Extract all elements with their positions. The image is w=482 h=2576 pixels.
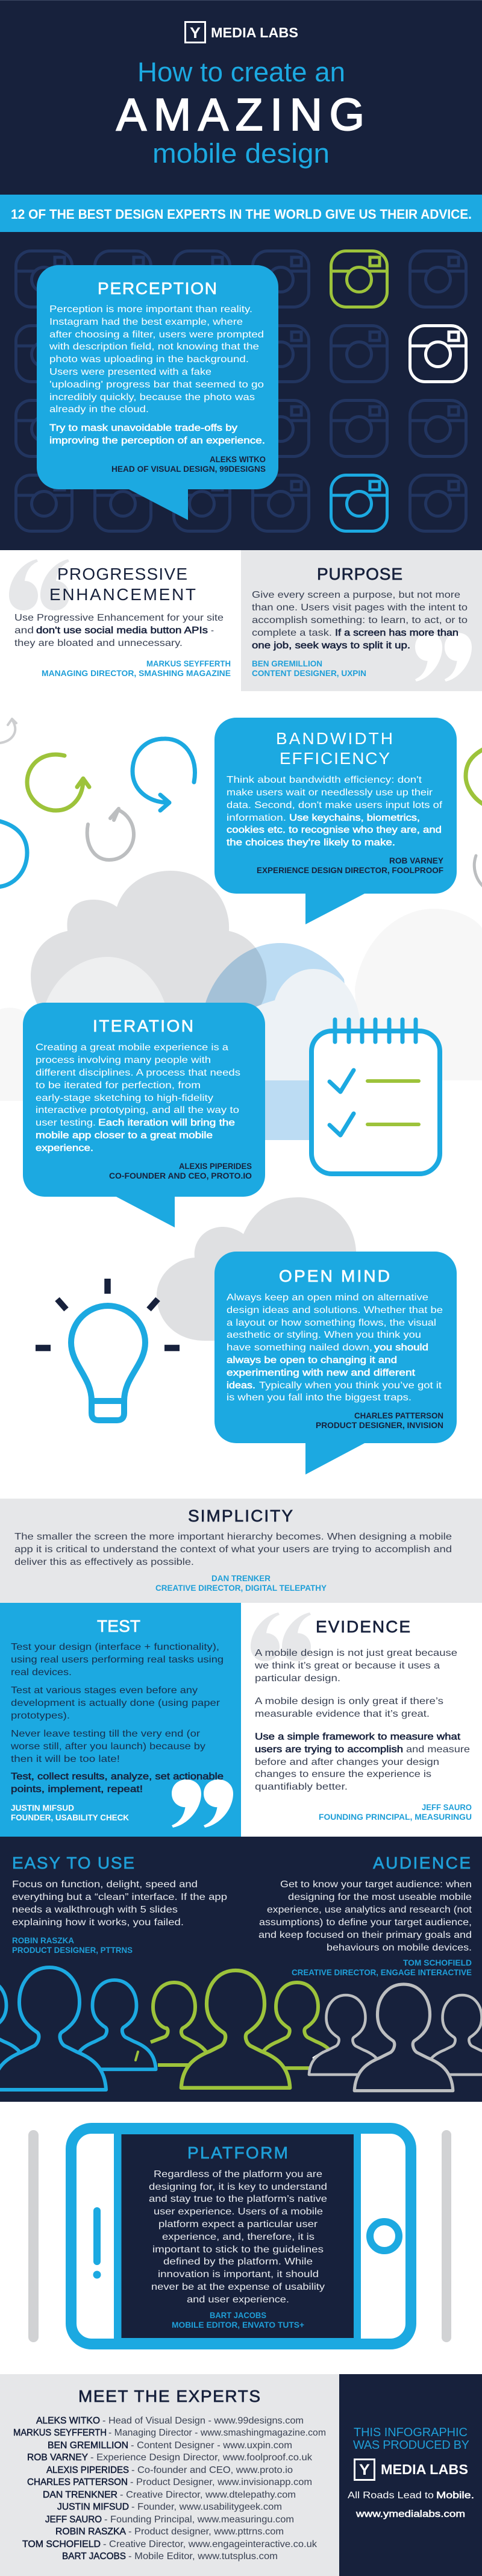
text: iteration body: different disciplines. A process that needs bbox=[36, 1068, 240, 1078]
author: Bart Jacobs bbox=[172, 2310, 304, 2330]
author: Tom Schofield: TOM SCHOFIELD bbox=[403, 1958, 472, 1967]
text: open mind body: design ideas and solutions. Whether that be bbox=[227, 1305, 443, 1315]
text: open mind body: you should bbox=[374, 1343, 428, 1353]
tagline: Mobile. bbox=[436, 2490, 474, 2501]
heading: produced by: THIS INFOGRAPHIC bbox=[354, 2426, 468, 2439]
heading: open mind: OPEN MIND bbox=[279, 1267, 391, 1285]
text: open mind body: ideas. bbox=[227, 1380, 255, 1391]
text: bandwidth body: the choices they're likely to make. bbox=[227, 838, 395, 848]
list: experts: BEN GREMILLION bbox=[48, 2440, 128, 2451]
list: experts: - Managing Director - www.smashingmagazine.com bbox=[108, 2428, 326, 2438]
list: experts: - Mobile Editor, www.tutsplus.com bbox=[128, 2551, 278, 2562]
list: experts: - Creative Director, www.engageinteractive.co.uk bbox=[103, 2539, 318, 2549]
logo: Y Media Labs: MEDIA LABS bbox=[211, 25, 298, 40]
text: progressive body: and bbox=[14, 625, 34, 636]
text: evidence body: we think it’s great or because it uses a bbox=[254, 1661, 440, 1671]
text: platform body: defined by the platform. While bbox=[163, 2257, 313, 2267]
text: platform body: important to stick to the guidelines bbox=[152, 2245, 324, 2255]
text: bandwidth body: Use keychains, biometrics, bbox=[289, 813, 420, 823]
author: Tom Schofield bbox=[292, 1958, 472, 1977]
list: experts: ROB VARNEY bbox=[27, 2452, 88, 2463]
text: simplicity body: app it is critical to understand the context of what your users are trying to accomplish and bbox=[14, 1544, 452, 1555]
text: open mind body: have something nailed down, bbox=[227, 1343, 372, 1353]
text: iteration body: experience. bbox=[36, 1143, 93, 1153]
text: iteration body: user testing. bbox=[36, 1118, 96, 1128]
text: easy to use body: everything but a “clean” interface. If the app bbox=[12, 1892, 227, 1902]
panel: bandwidth efficiency bubble bbox=[214, 718, 457, 924]
text: audience body: behaviours on mobile devices. bbox=[327, 1943, 472, 1953]
text: test body: worse still, after you launch) because by bbox=[10, 1741, 205, 1752]
text: progressive body bbox=[14, 613, 224, 648]
text: test body: Test, collect results, analyze, set actionable bbox=[11, 1772, 224, 1782]
banner: 12 OF THE BEST DESIGN EXPERTS IN THE WORLD GIVE US THEIR ADVICE. bbox=[11, 207, 472, 222]
heading: produced by: WAS PRODUCED BY bbox=[353, 2439, 469, 2452]
text: progressive body: Use Progressive Enhancement for your site bbox=[14, 613, 224, 623]
text: purpose body bbox=[252, 590, 468, 651]
author: Robin Raszka bbox=[12, 1935, 133, 1955]
heading: easy to use: EASY TO USE bbox=[12, 1854, 136, 1872]
text: audience body bbox=[258, 1879, 472, 1953]
icon: light bulb bbox=[36, 1279, 180, 1420]
text: bandwidth body: data. Second, don't make users input lots of bbox=[227, 800, 443, 810]
author: Jeff Sauro bbox=[319, 1802, 472, 1822]
author: Aleks Witko bbox=[111, 454, 266, 474]
text: open mind body: is when you fall into the biggest traps. bbox=[227, 1393, 412, 1403]
list: experts: - Founder, www.usabilitygeek.com bbox=[131, 2502, 282, 2512]
logo: Y Media Labs bbox=[354, 2460, 468, 2480]
text: open mind body: always be open to changing it and bbox=[227, 1355, 397, 1365]
list: experts: - Co-founder and CEO, www.proto.io bbox=[131, 2465, 293, 2475]
heading: perception: PERCEPTION bbox=[98, 279, 218, 298]
author: Ben Gremillion: BEN GREMILLION bbox=[252, 659, 322, 668]
icon: closing quote mark bbox=[172, 1779, 233, 1828]
author: Bart Jacobs: MOBILE EDITOR, ENVATO TUTS+ bbox=[172, 2320, 304, 2330]
author: Dan Trenker: CREATIVE DIRECTOR, DIGITAL TELEPATHY bbox=[155, 1583, 327, 1593]
clouds: lower bbox=[157, 1197, 356, 1341]
text: simplicity body: The smaller the screen the more important hierarchy becomes. When designing a mobile bbox=[14, 1532, 452, 1542]
text: platform body: user experience. Users of a mobile bbox=[154, 2207, 323, 2217]
title: How to create an bbox=[137, 57, 345, 87]
text: purpose body: Give every screen a purpose, but not more bbox=[252, 590, 460, 600]
text: bandwidth body: information. bbox=[227, 813, 286, 823]
author: Ben Gremillion bbox=[252, 659, 366, 678]
text: perception body: improving the perception of an experience. bbox=[49, 436, 265, 446]
author: Alexis Piperides: CO-FOUNDER AND CEO, PROTO.IO bbox=[109, 1171, 252, 1180]
panel: platform phone bbox=[28, 2128, 451, 2344]
text: progressive body: don't use social media button APIs bbox=[36, 625, 208, 636]
text: evidence body: before and after changes your design bbox=[255, 1757, 439, 1767]
text: platform body: designing for, it is key to understand bbox=[149, 2182, 327, 2192]
heading: bandwidth efficiency: EFFICIENCY bbox=[280, 749, 391, 768]
logo: Y Media Labs bbox=[186, 22, 298, 42]
text: test body: development is actually done (using paper bbox=[11, 1698, 221, 1708]
author: Alexis Piperides bbox=[109, 1161, 252, 1180]
panel: meet the experts bbox=[0, 2374, 339, 2576]
text: open mind body: a layout or how something flows, the visual bbox=[227, 1318, 436, 1328]
logo: Y Media Labs: Y bbox=[359, 2462, 370, 2478]
list: experts: JEFF SAURO bbox=[45, 2515, 102, 2525]
icon: phone body bbox=[71, 2128, 411, 2344]
text: platform body: Regardless of the platform you are bbox=[154, 2169, 322, 2180]
text: platform body: never be at the expense of usability bbox=[151, 2282, 325, 2292]
text: perception body: Instagram had the best example, where bbox=[49, 317, 243, 327]
author: Justin Mifsud: JUSTIN MIFSUD bbox=[11, 1803, 74, 1813]
heading: bandwidth efficiency bbox=[276, 729, 394, 768]
text: iteration body: Creating a great mobile experience is a bbox=[36, 1042, 228, 1053]
text: iteration body: Each iteration will bring the bbox=[98, 1118, 235, 1128]
list: experts: CHARLES PATTERSON bbox=[27, 2477, 128, 2487]
icon grid: cameras bbox=[16, 251, 466, 531]
author: Dan Trenker bbox=[155, 1573, 327, 1593]
list: experts: JUSTIN MIFSUD bbox=[57, 2502, 129, 2512]
text: evidence body: and measure bbox=[406, 1744, 470, 1755]
heading: platform: PLATFORM bbox=[187, 2143, 289, 2162]
text: perception body: with description field, not knowing that the bbox=[49, 342, 259, 352]
author: Charles Patterson: PRODUCT DESIGNER, INVISION bbox=[316, 1420, 443, 1430]
text: open mind body: Always keep an open mind on alternative bbox=[227, 1293, 428, 1303]
text: platform body: experience, and, therefore, it is bbox=[162, 2232, 315, 2242]
icon: refresh arrows bbox=[0, 719, 482, 887]
text: audience body: and keep focused on their primary goals and bbox=[258, 1930, 472, 1940]
text: perception body: already in the cloud. bbox=[49, 404, 149, 415]
heading: meet the experts: MEET THE EXPERTS bbox=[78, 2387, 261, 2405]
text: platform body bbox=[149, 2169, 327, 2305]
text: perception body: photo was uploading in the background. bbox=[49, 354, 249, 365]
text: iteration body: process involving many people with bbox=[36, 1055, 211, 1065]
list: experts: - Experience Design Director, www.foolproof.co.uk bbox=[90, 2452, 313, 2463]
text: perception body: after choosing a filter, users were prompted bbox=[49, 330, 264, 340]
heading: progressive enhancement: PROGRESSIVE bbox=[57, 565, 189, 583]
text: iteration body: mobile app closer to a great mobile bbox=[36, 1130, 213, 1141]
text: evidence body: users are trying to accomplish bbox=[255, 1744, 403, 1755]
list: experts: TOM SCHOFIELD bbox=[22, 2539, 101, 2549]
author: Aleks Witko: HEAD OF VISUAL DESIGN, 99DESIGNS bbox=[111, 464, 266, 474]
heading: simplicity: SIMPLICITY bbox=[188, 1506, 294, 1525]
heading: bandwidth efficiency: BANDWIDTH bbox=[276, 729, 394, 748]
tagline bbox=[348, 2490, 474, 2501]
text: purpose body: accomplish something: to learn, to act, or to bbox=[252, 615, 468, 625]
author: Alexis Piperides: ALEXIS PIPERIDES bbox=[179, 1161, 252, 1171]
author: Jeff Sauro: FOUNDING PRINCIPAL, MEASURINGU bbox=[319, 1812, 472, 1822]
text: bandwidth body: make users wait or needlessly use up their bbox=[227, 788, 433, 798]
text: purpose body: If a screen has more than bbox=[335, 628, 459, 638]
text: platform body: and stay true to the platform’s native bbox=[149, 2194, 327, 2204]
text: perception body: Perception is more important than reality. bbox=[49, 304, 252, 315]
list: experts: - Head of Visual Design - www.99designs.com bbox=[102, 2416, 304, 2426]
author: Markus Seyfferth: MANAGING DIRECTOR, SMASHING MAGAZINE bbox=[42, 668, 231, 678]
text: perception body bbox=[49, 304, 265, 446]
text: perception body: 'uploading' progress bar that seemed to go bbox=[49, 380, 264, 390]
text: evidence body: particular design. bbox=[255, 1673, 340, 1684]
panel: simplicity bbox=[0, 1499, 482, 1603]
decorative motion bars bbox=[28, 2130, 39, 2342]
panel: progressive enhancement bbox=[9, 559, 231, 678]
author: Jeff Sauro: JEFF SAURO bbox=[422, 1802, 472, 1812]
list: experts: ALEKS WITKO bbox=[36, 2416, 100, 2426]
text: evidence body: measurable evidence that it’s great. bbox=[255, 1709, 430, 1719]
author: Markus Seyfferth: MARKUS SEYFFERTH bbox=[146, 659, 231, 668]
panel: producer credit bbox=[339, 2374, 482, 2576]
text: audience body: Get to know your target audience: when bbox=[280, 1879, 472, 1890]
panel: easy to use and audience bbox=[0, 1837, 482, 2102]
text: bandwidth body: cookies etc. to recognise who they are, and bbox=[227, 825, 442, 835]
list: experts: ROBIN RASZKA bbox=[55, 2527, 126, 2537]
text: audience body: experience, use analytics and research (not bbox=[267, 1905, 472, 1915]
list: experts: - Product designer, www.pttrns.com bbox=[128, 2527, 284, 2537]
author: Dan Trenker: DAN TRENKER bbox=[211, 1573, 271, 1583]
illustration: audience silhouettes bbox=[0, 1967, 482, 2091]
tagline: All Roads Lead to bbox=[348, 2490, 434, 2501]
text: perception body: Users were presented with a fake bbox=[49, 367, 211, 377]
text: test body bbox=[10, 1642, 224, 1794]
text: perception body: Try to mask unavoidable trade-offs by bbox=[49, 423, 237, 433]
text: iteration body bbox=[36, 1042, 240, 1153]
icon: opening quote mark bbox=[9, 559, 69, 610]
logo: Y Media Labs: MEDIA LABS bbox=[381, 2462, 468, 2477]
list: experts: - Founding Principal, www.measuringu.com bbox=[104, 2515, 294, 2525]
text: test body: prototypes). bbox=[11, 1711, 70, 1721]
heading: purpose: PURPOSE bbox=[317, 565, 404, 583]
text: test body: Never leave testing till the very end (or bbox=[11, 1729, 201, 1739]
text: easy to use body: needs a walkthrough with 5 slides bbox=[12, 1905, 178, 1915]
panel: purpose bbox=[241, 550, 482, 691]
text: progressive body: they are bloated and unnecessary. bbox=[14, 638, 183, 648]
list: experts bbox=[13, 2416, 326, 2562]
text: evidence body: A mobile design is not just great because bbox=[255, 1648, 457, 1658]
text: evidence body bbox=[254, 1648, 470, 1792]
list: experts: - Creative Director, www.dtelepathy.com bbox=[120, 2490, 296, 2500]
text: test body: points, implement, repeat! bbox=[11, 1784, 143, 1794]
heading: produced by bbox=[353, 2426, 469, 2452]
banner bbox=[0, 195, 482, 232]
text: open mind body: experimenting with new and different bbox=[227, 1368, 416, 1378]
text: iteration body: to be iterated for perfection, from bbox=[36, 1080, 201, 1091]
title: mobile design bbox=[152, 138, 330, 169]
text: purpose body: than one. Users visit pages with the intent to bbox=[252, 603, 468, 613]
icon: closing quote mark bbox=[415, 633, 472, 682]
list: experts: DAN TRENKNER bbox=[43, 2490, 117, 2500]
author: Bart Jacobs: BART JACOBS bbox=[210, 2310, 266, 2320]
panel: iteration bubble bbox=[23, 1003, 265, 1227]
text: iteration body: interactive prototyping, and all the way to bbox=[36, 1105, 239, 1115]
heading: iteration: ITERATION bbox=[93, 1017, 195, 1035]
author: Rob Varney: EXPERIENCE DESIGN DIRECTOR, FOOLPROOF bbox=[257, 865, 443, 875]
logo: Y Media Labs: Y bbox=[190, 25, 201, 42]
heading: progressive enhancement bbox=[49, 565, 197, 604]
text: evidence body: A mobile design is only great if there’s bbox=[255, 1696, 443, 1706]
text: open mind body: Typically when you think you’ve got it bbox=[259, 1380, 442, 1391]
text: evidence body: quantifiably better. bbox=[255, 1782, 348, 1792]
text: bandwidth body bbox=[227, 775, 443, 848]
panel: test bbox=[0, 1603, 241, 1837]
text: platform body: and user experience. bbox=[187, 2295, 289, 2305]
author: Charles Patterson: CHARLES PATTERSON bbox=[354, 1411, 443, 1420]
heading: test: TEST bbox=[97, 1617, 142, 1635]
website: www.ymedialabs.com bbox=[355, 2509, 465, 2519]
text: bandwidth body: Think about bandwidth efficiency: don't bbox=[227, 775, 422, 785]
text: test body: using real users performing real tasks using bbox=[11, 1655, 224, 1665]
author: Robin Raszka: PRODUCT DESIGNER, PTTRNS bbox=[12, 1945, 133, 1955]
text: test body: then it will be too late! bbox=[11, 1754, 120, 1764]
text: easy to use body: Focus on function, delight, speed and bbox=[12, 1879, 198, 1890]
panel: open mind bubble bbox=[214, 1252, 457, 1474]
text: purpose body: complete a task. bbox=[252, 628, 332, 638]
author: Rob Varney bbox=[257, 856, 444, 875]
heading: audience: AUDIENCE bbox=[373, 1854, 472, 1872]
text: test body: real devices. bbox=[11, 1667, 72, 1678]
author: Rob Varney: ROB VARNEY bbox=[389, 856, 444, 865]
title: AMAZING bbox=[116, 89, 365, 140]
text: evidence body: changes to ensure the experience is bbox=[255, 1769, 431, 1779]
heading: progressive enhancement: ENHANCEMENT bbox=[49, 585, 197, 604]
list: experts: MARKUS SEYFFERTH bbox=[13, 2428, 107, 2438]
text: audience body: assumptions) to define your target audience, bbox=[259, 1917, 472, 1928]
heading: evidence: EVIDENCE bbox=[316, 1617, 412, 1636]
icon: notebook checklist bbox=[311, 1020, 440, 1174]
panel: perception bubble bbox=[37, 265, 278, 520]
author: Robin Raszka: ROBIN RASZKA bbox=[12, 1935, 74, 1945]
text: audience body: designing for the most useable mobile bbox=[288, 1892, 472, 1902]
text: simplicity body bbox=[14, 1532, 452, 1567]
text: test body: Test at various stages even before any bbox=[11, 1685, 198, 1696]
author: Justin Mifsud: FOUNDER, USABILITY CHECK bbox=[11, 1813, 129, 1822]
text: open mind body bbox=[227, 1293, 443, 1403]
list: experts: - Content Designer - www.uxpin.com bbox=[131, 2440, 292, 2451]
text: progressive body: - bbox=[211, 625, 214, 636]
clouds: upper bbox=[0, 871, 482, 1140]
title bbox=[116, 57, 365, 169]
list: experts: - Product Designer, www.invisionapp.com bbox=[130, 2477, 312, 2487]
text: easy to use body bbox=[12, 1879, 227, 1928]
text: platform body: innovation is important, it should bbox=[158, 2269, 319, 2280]
text: easy to use body: explaining how it works, you failed. bbox=[12, 1917, 184, 1928]
text: iteration body: early-stage sketching to high-fidelity bbox=[36, 1093, 213, 1103]
author: Charles Patterson bbox=[316, 1411, 443, 1430]
text: test body: Test your design (interface + functionality), bbox=[11, 1642, 219, 1652]
author: Ben Gremillion: CONTENT DESIGNER, UXPIN bbox=[252, 668, 366, 678]
icon: opening quote mark bbox=[251, 1612, 311, 1661]
text: platform body: platform expect a particular user bbox=[158, 2219, 318, 2230]
text: purpose body: one job, seek ways to split it up. bbox=[252, 641, 410, 651]
author: Markus Seyfferth bbox=[42, 659, 231, 678]
list: experts: BART JACOBS bbox=[62, 2551, 126, 2562]
list: experts: ALEXIS PIPERIDES bbox=[46, 2465, 129, 2475]
author: Justin Mifsud bbox=[11, 1803, 129, 1822]
author: Aleks Witko: ALEKS WITKO bbox=[210, 454, 266, 464]
text: perception body: incredibly quickly, because the photo was bbox=[49, 392, 255, 403]
text: evidence body: Use a simple framework to measure what bbox=[255, 1732, 461, 1742]
text: simplicity body: deliver this as effectively as possible. bbox=[14, 1557, 194, 1567]
author: Tom Schofield: CREATIVE DIRECTOR, ENGAGE INTERACTIVE bbox=[292, 1967, 472, 1977]
panel: evidence bbox=[251, 1612, 472, 1822]
text: open mind body: aesthetic or styling. When you think you bbox=[227, 1330, 421, 1340]
header panel bbox=[0, 0, 482, 550]
